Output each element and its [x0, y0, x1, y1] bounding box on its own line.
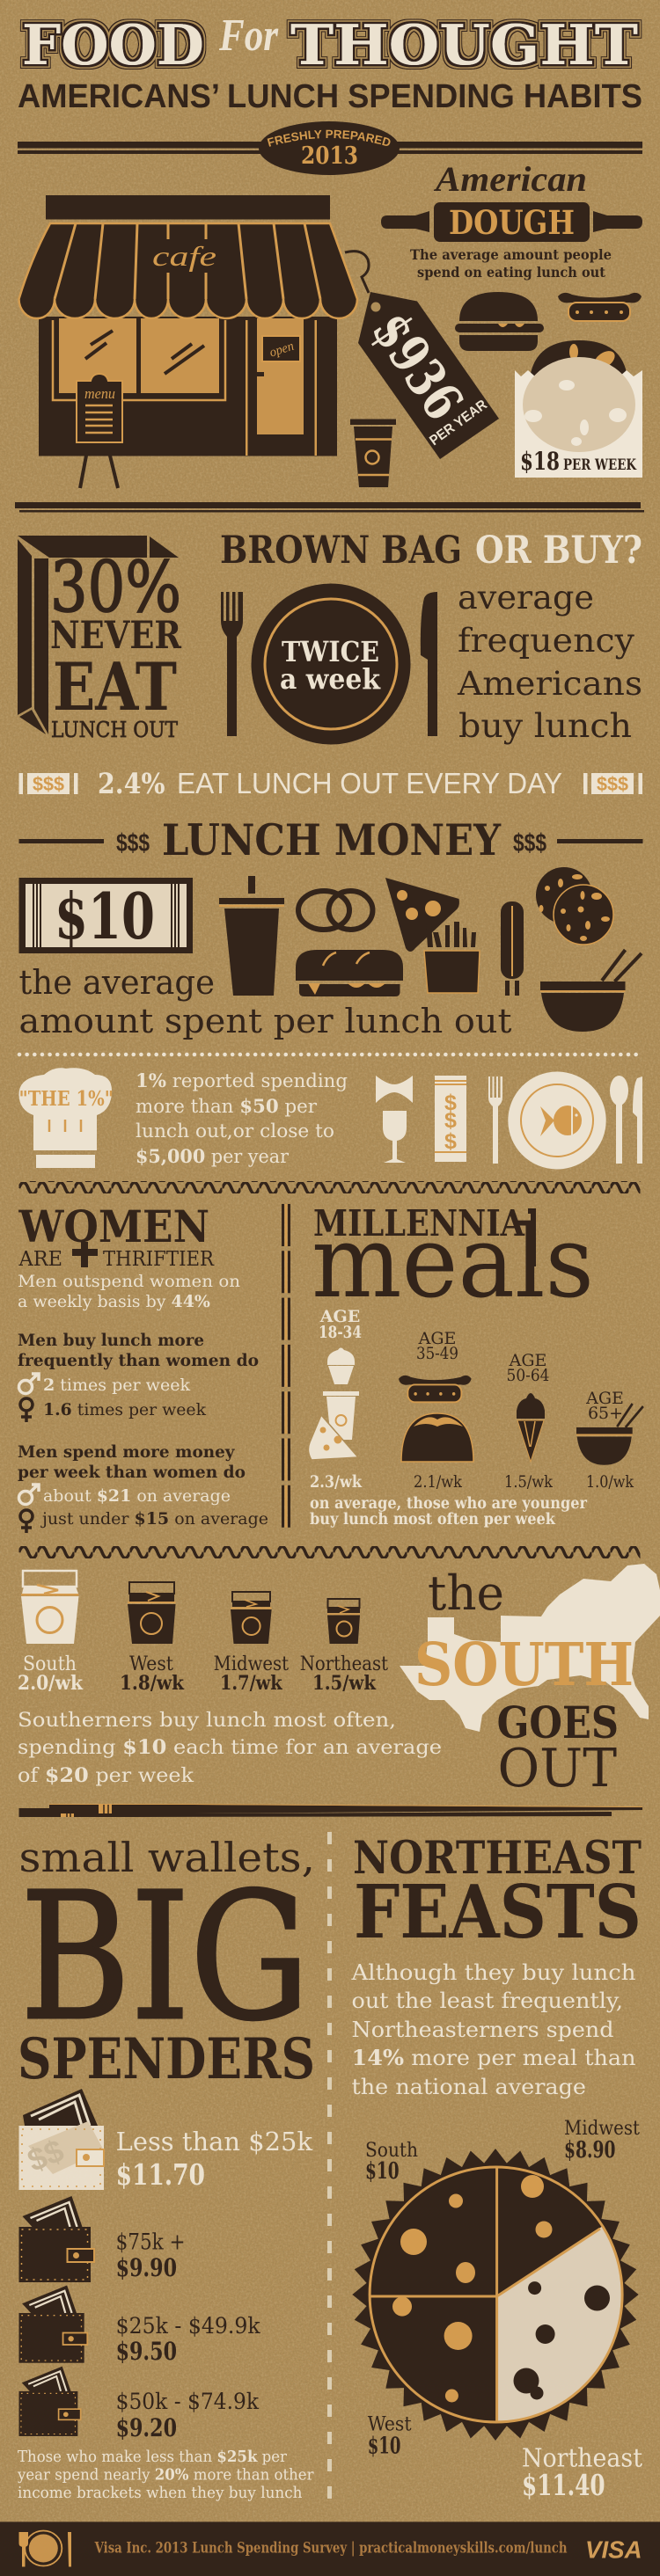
- panel: regional cups: [18, 1571, 442, 1787]
- heading: brown bag or buy: BROWN BAG: [220, 529, 462, 573]
- money tag right: [583, 773, 642, 795]
- money tag left: [19, 773, 77, 795]
- paragraph: Southerners buy lunch most often,: [18, 1710, 396, 1732]
- banner: 2.4% eat lunch out every day: [19, 767, 642, 800]
- icon: hot dog: [399, 1376, 472, 1402]
- text: men spend more: Men spend more money: [18, 1442, 235, 1462]
- text: $50k-$74.9k: $50k - $74.9k: [116, 2389, 260, 2414]
- pie label: midwest: [564, 2118, 640, 2164]
- pie label: northeast: [522, 2443, 642, 2502]
- text: average frequency: buy lunch: [458, 707, 632, 745]
- pie label: south: $10: [365, 2158, 400, 2185]
- text: 1% reported spending: more than $50 per: [136, 1095, 318, 1117]
- text: $75k+: [116, 2229, 185, 2282]
- panel: small wallets, big spenders: [17, 1834, 315, 2502]
- text: $25k-$49.9k: $25k - $49.9k: [116, 2313, 260, 2339]
- heading: MILLENNIA: [313, 1202, 525, 1244]
- stat: female spending: just under $15 on average: [40, 1509, 268, 1529]
- heading: [18, 1200, 215, 1271]
- age labels: 18-34: [319, 1323, 362, 1342]
- dotted divider: [19, 1053, 642, 1056]
- region labels: 2.0/wk: [18, 1672, 84, 1695]
- paragraph: of $20 per week: [18, 1764, 194, 1787]
- text: 1% reported spending: lunch out,or close to: [136, 1120, 334, 1142]
- weekly rates: 1.0/wk: [586, 1472, 634, 1492]
- region labels: 1.5/wk: [312, 1672, 377, 1695]
- section: 30% never eat lunch out: LUNCH OUT: [51, 718, 178, 742]
- text: average frequency: average: [458, 579, 594, 617]
- open sign: open: [268, 339, 296, 361]
- plate: twice a week: TWICE: [282, 635, 379, 668]
- age labels: AGE: [509, 1351, 546, 1370]
- title: Thought: THOUGHT: [290, 12, 638, 77]
- map: the south goes out: SOUTH: [414, 1630, 634, 1699]
- sign board: [46, 195, 330, 220]
- icon: female symbol: [20, 1510, 33, 1533]
- heading: brown bag or buy: [220, 529, 642, 573]
- icon: milkshake, drink, pizza: [308, 1347, 359, 1460]
- pie label: west: West: [368, 2413, 412, 2435]
- illustration: cafe storefront: [19, 195, 357, 488]
- dashed vertical divider: [327, 1832, 332, 2503]
- text: men buy more: frequently than women do: [18, 1351, 259, 1370]
- description: The average amount people: [410, 246, 612, 263]
- plate: twice a week: a week: [280, 662, 381, 696]
- text: average amount spent: [19, 963, 512, 1040]
- paragraph: the national average: [352, 2075, 586, 2099]
- section: 30% never eat lunch out: [18, 536, 181, 742]
- icon: female symbol: [20, 1398, 33, 1422]
- pie label: northeast: Northeast: [522, 2443, 642, 2473]
- heading: ARE: [18, 1248, 62, 1271]
- Visa logo: VISA: [585, 2536, 642, 2564]
- age labels: 65+: [588, 1404, 623, 1423]
- paragraph: Northeasterners spend: [352, 2018, 614, 2042]
- region labels: [18, 1653, 388, 1695]
- text: average amount spent: amount spent per lunch out: [19, 1002, 512, 1040]
- icon: hot dog: [558, 293, 642, 321]
- caption: buy lunch most often per week: [310, 1511, 556, 1529]
- American Dough heading: [381, 159, 642, 281]
- icon: taco: [401, 1413, 473, 1462]
- icon: corn dog: [501, 901, 524, 996]
- heading: SPENDERS: [18, 2026, 315, 2092]
- text: average frequency: frequency: [458, 622, 634, 660]
- awning: cafe: [152, 240, 216, 272]
- American Dough heading: American: [433, 159, 587, 199]
- pasta divider: [283, 1204, 289, 1528]
- menu board: menu: [84, 385, 115, 402]
- text: 1% reported spending: $5,000 per year: [136, 1145, 290, 1167]
- 3D frame: [18, 536, 179, 734]
- caption: [310, 1495, 588, 1529]
- money tag left: $$$: [33, 773, 64, 795]
- chopsticks divider: [19, 1805, 642, 1817]
- pie label: midwest: $8.90: [564, 2137, 616, 2164]
- text: $50k-$74.9k: $9.20: [116, 2413, 177, 2442]
- age labels: AGE: [585, 1389, 624, 1408]
- text: 1% reported spending: 1% reported spending: [136, 1069, 348, 1091]
- icon: noodle bowl: [540, 950, 642, 1032]
- double rule with year badge: [18, 121, 642, 175]
- divider rule: [15, 502, 644, 512]
- footer: [0, 2521, 660, 2576]
- title: Food: FOOD: [22, 12, 204, 77]
- cup: northeast: [327, 1599, 360, 1644]
- icon: male symbol: [19, 1374, 39, 1393]
- icon: bow tie and wine glass: [376, 1076, 413, 1163]
- paragraph: out the least frequently,: [352, 1989, 623, 2013]
- weekly rates: 2.3/wk: [310, 1472, 363, 1492]
- map: the south goes out: GOES: [497, 1697, 619, 1748]
- region labels: West: [129, 1653, 173, 1675]
- icon: napkin: [435, 1076, 466, 1162]
- icon: fries: [424, 922, 480, 993]
- text: men buy more: Men buy lunch more: [18, 1331, 204, 1350]
- map: the south goes out: [400, 1564, 660, 1799]
- intro text: a weekly basis by 44%: [18, 1292, 210, 1311]
- section: 30% never eat lunch out: EAT: [53, 648, 177, 726]
- heading: lunch money: $$$: [116, 829, 150, 857]
- subtitle: AMERICANS’ LUNCH SPENDING HABITS: [18, 78, 642, 115]
- region labels: Midwest: [214, 1653, 289, 1675]
- caption: year spend nearly 20% more than other: [17, 2466, 314, 2484]
- icon: male symbol: [19, 1485, 39, 1504]
- wallet: less than $25k: [19, 2089, 104, 2190]
- banner: 2.4% eat lunch out every day: 2.4%: [98, 767, 165, 800]
- icon: fork: [221, 592, 243, 736]
- pie label: south: [365, 2140, 418, 2185]
- age labels: 35-49: [416, 1344, 458, 1363]
- wallet: less than $25k: $$: [22, 2132, 69, 2178]
- heading: lunch money: [19, 814, 642, 865]
- cup: midwest: [231, 1592, 272, 1644]
- region labels: Northeast: [300, 1653, 388, 1675]
- caption: on average, those who are younger: [310, 1495, 588, 1513]
- icon: napkin: $: [444, 1091, 457, 1115]
- paragraph: [18, 1710, 442, 1787]
- heading: small wallets,: [19, 1834, 315, 1881]
- toppings: [392, 2175, 553, 2403]
- price tag: $936 per year: PER YEAR: [427, 398, 490, 449]
- heading: lunch money: LUNCH MONEY: [162, 814, 502, 865]
- wavy divider: [19, 1181, 641, 1193]
- heading: lunch money: $$$: [513, 829, 546, 857]
- heading: BIG: [20, 1855, 310, 2059]
- map of the southern states: [400, 1564, 660, 1732]
- caption: [17, 2448, 314, 2502]
- pie chart: [352, 2149, 639, 2441]
- text: $25k-$49.9k: $9.50: [116, 2337, 177, 2366]
- text: 1% reported spending: [136, 1069, 348, 1167]
- map: the south goes out: the: [428, 1565, 504, 1621]
- text: average frequency: [457, 579, 642, 745]
- title: For: For: [218, 11, 279, 61]
- icon: napkin: $: [444, 1129, 457, 1154]
- icon: ice cream cone: [517, 1393, 545, 1462]
- caption: Those who make less than $25k per: [18, 2448, 287, 2466]
- icon: paper bag with bun, $18 per week: $18: [520, 447, 560, 476]
- icon: ten dollar bill: $10: [55, 879, 155, 953]
- text: $75k+: $9.90: [116, 2253, 177, 2282]
- building: [39, 317, 337, 456]
- paragraph: 14% more per meal than: [352, 2045, 635, 2070]
- pie label: west: $10: [368, 2434, 401, 2460]
- icon: cookies: [536, 867, 613, 945]
- heading: WOMEN: [18, 1200, 209, 1252]
- text: less than $25k: $11.70: [116, 2157, 205, 2192]
- double rule with year badge: FRESHLY PREPARED: [268, 130, 391, 147]
- heading: THRIFTIER: [103, 1248, 215, 1271]
- heading: meals: [312, 1204, 594, 1320]
- paragraph: [350, 1960, 635, 2099]
- section: header: [18, 11, 642, 175]
- section: 30% never eat lunch out: 30%: [50, 546, 181, 628]
- intro text: [18, 1272, 240, 1311]
- pie label: midwest: Midwest: [564, 2118, 640, 2140]
- region labels: South: [23, 1653, 77, 1675]
- banner: 2.4% eat lunch out every day: EAT LUNCH OUT EVERY DAY: [177, 767, 562, 799]
- region labels: 1.7/wk: [220, 1672, 282, 1695]
- age labels: [319, 1307, 624, 1423]
- heading: [353, 1832, 642, 1955]
- stat: male frequency: 2 times per week: [43, 1376, 190, 1395]
- paragraph: spending $10 each time for an average: [18, 1736, 442, 1759]
- text: less than $25k: [116, 2127, 312, 2192]
- price tag: $936 per year: $936: [360, 302, 474, 431]
- age labels: 50-64: [507, 1366, 549, 1385]
- text: $25k-$49.9k: [116, 2313, 260, 2366]
- awning: [19, 223, 357, 318]
- panel: women are thriftier: [18, 1200, 268, 1533]
- text: men buy more: [18, 1331, 259, 1370]
- rolling pin: [381, 202, 642, 242]
- icon: burger: [455, 292, 544, 351]
- price tag: $936 per year: [345, 252, 499, 459]
- section: 30% never eat lunch out: NEVER: [50, 614, 181, 658]
- icon: napkin: $: [444, 1108, 457, 1133]
- text: $75k+: $75k +: [116, 2229, 185, 2255]
- panel: millennial meals: [308, 1202, 643, 1529]
- text: men spend more: per week than women do: [18, 1463, 246, 1482]
- wallet: $25k-$49.9k: [19, 2285, 87, 2363]
- icon: fancy place setting: [488, 1071, 642, 1170]
- double rule with year badge: 2013: [301, 142, 358, 170]
- age labels: AGE: [319, 1307, 360, 1326]
- weekly rates: [310, 1472, 634, 1492]
- pie label: northeast: $11.40: [522, 2468, 605, 2502]
- paragraph: Although they buy lunch: [350, 1960, 635, 1985]
- weekly rates: 2.1/wk: [414, 1472, 462, 1492]
- slice borders: [370, 2167, 622, 2422]
- menu board: [77, 374, 122, 488]
- icon: paper bag with bun, $18 per week: PER WEEK: [563, 456, 637, 474]
- weekly rates: 1.5/wk: [504, 1472, 553, 1492]
- icon: pizza slice: [385, 878, 459, 952]
- wallet: $50k-$74.9k: [19, 2367, 81, 2436]
- map: the south goes out: OUT: [498, 1738, 617, 1799]
- region labels: 1.8/wk: [120, 1672, 185, 1695]
- intro text: Men outspend women on: [18, 1272, 240, 1291]
- cup: west: [128, 1582, 176, 1644]
- icon: soda cup: [219, 876, 284, 996]
- icon: paper bag with bun, $18 per week: [515, 340, 642, 478]
- description: spend on eating lunch out: [417, 264, 606, 281]
- description: [410, 246, 612, 281]
- wallet: $75k+: [19, 2196, 94, 2282]
- icon: chef hat: [18, 1068, 114, 1168]
- text: less than $25k: Less than $25k: [116, 2127, 312, 2156]
- money tag right: $$$: [597, 773, 628, 795]
- rolling pin: DOUGH: [449, 203, 575, 242]
- icon: coffee cup: [350, 419, 396, 487]
- icon: chef hat: "THE 1%": [19, 1087, 114, 1111]
- cup: south: [21, 1571, 79, 1644]
- wavy divider: [19, 1546, 641, 1558]
- plate: twice a week: [252, 584, 410, 744]
- icon: knife: [421, 592, 437, 736]
- pie label: west: [368, 2413, 412, 2460]
- starburst crust: [352, 2149, 639, 2441]
- icon: noodle bowl: [576, 1404, 643, 1465]
- slice: northeast: [497, 2226, 623, 2422]
- text: $50k-$74.9k: [116, 2389, 260, 2442]
- icon: sub sandwich: [296, 950, 403, 996]
- icon: onion rings: [298, 891, 373, 930]
- age labels: AGE: [418, 1329, 456, 1348]
- pie label: south: South: [365, 2140, 418, 2162]
- stat: male spending: about $21 on average: [43, 1486, 231, 1506]
- text: men spend more: [18, 1442, 246, 1482]
- open sign: [262, 336, 300, 361]
- footer icon: plate and cutlery: [19, 2531, 71, 2566]
- stat: female frequency: 1.6 times per week: [43, 1400, 206, 1419]
- panel: northeast feasts: [350, 1832, 642, 2502]
- text: average amount spent: the average: [19, 963, 215, 1002]
- text: average frequency: Americans: [457, 665, 642, 703]
- caption: income brackets when they buy lunch: [18, 2484, 303, 2502]
